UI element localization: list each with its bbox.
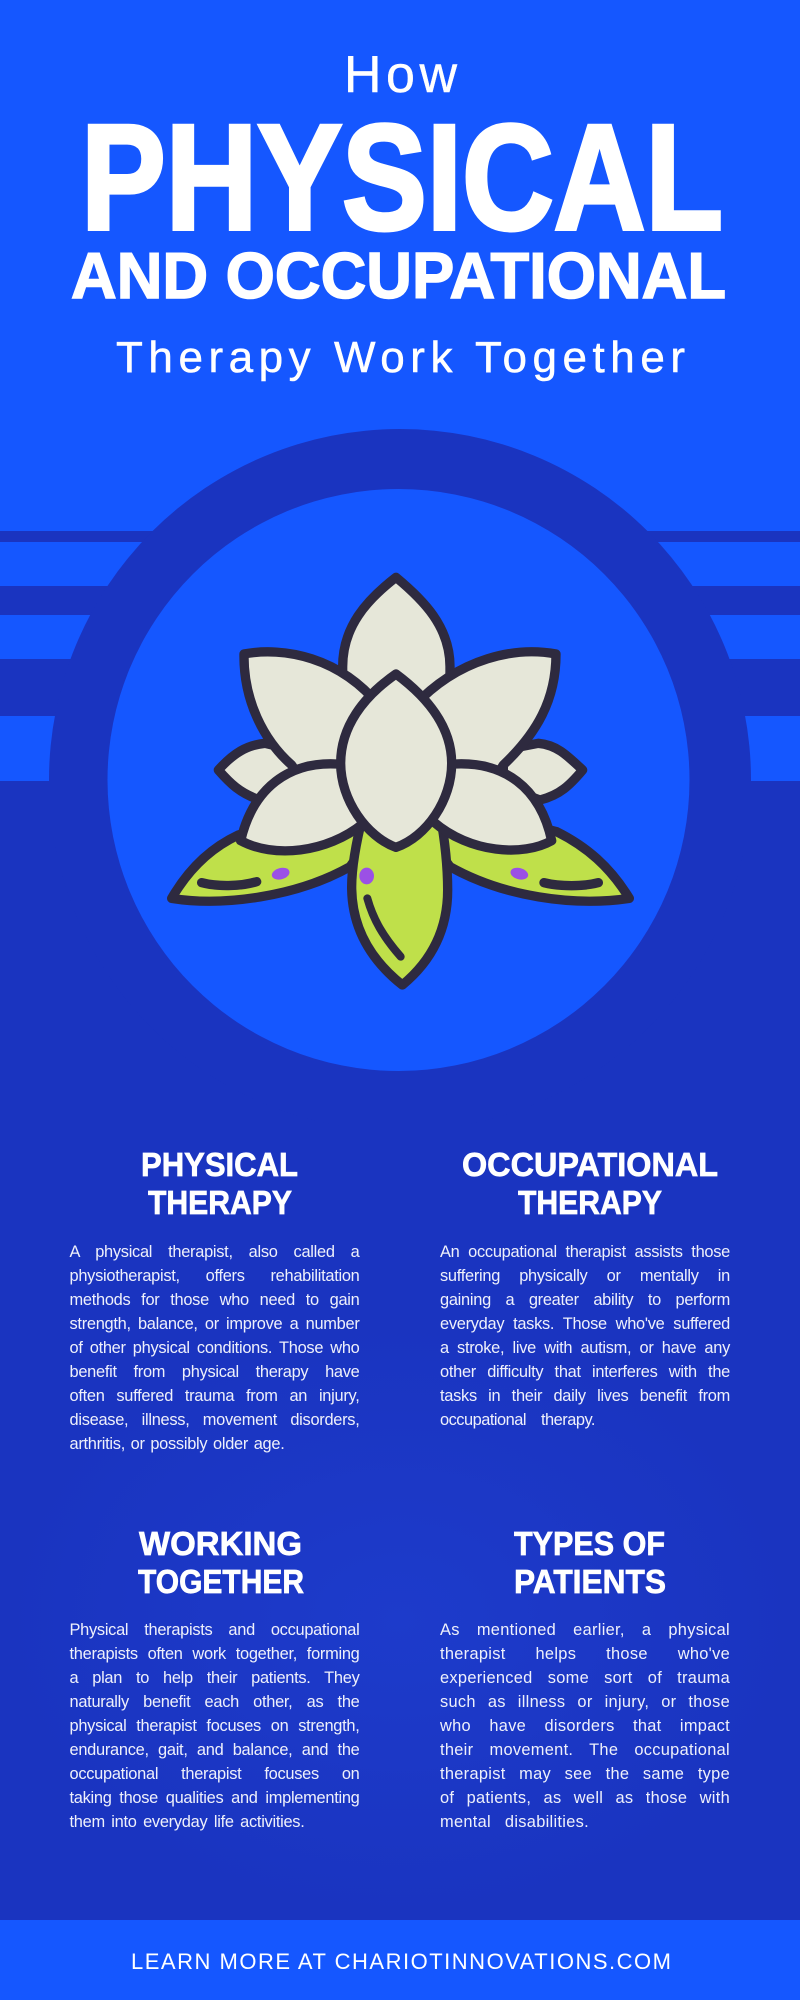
text: types of patients body: such as illness or injury, or those: [440, 1693, 730, 1711]
text: types of patients body: who have disorders that impact: [440, 1717, 730, 1735]
panel: working together: [70, 1528, 360, 1831]
text: physical therapy body: methods for those who need to gain: [70, 1291, 360, 1309]
text: physical therapy body: A physical therapist, also called a: [70, 1243, 360, 1261]
panel: types of patients: [440, 1528, 730, 1831]
text: occupational therapy body: a stroke, live with autism, or have any: [440, 1339, 730, 1357]
text: occupational therapy body: other difficulty that interferes with the: [440, 1363, 730, 1381]
text: types of patients body: experienced some sort of trauma: [440, 1669, 730, 1687]
heading: physical therapy: [141, 1150, 298, 1218]
text: occupational therapy body: gaining a greater ability to perform: [440, 1291, 730, 1309]
text: working together body: physical therapist focuses on strength,: [70, 1717, 360, 1735]
text: types of patients body: therapist may see the same type: [440, 1765, 730, 1783]
text: occupational therapy body: everyday tasks. Those who've suffered: [440, 1315, 730, 1333]
text: physical therapy body: strength, balance, or improve a number: [70, 1315, 360, 1333]
text: physical therapy body: often suffered trauma from an injury,: [70, 1387, 360, 1405]
icon: lotus flower: [167, 572, 634, 990]
text: working together body: Physical therapists and occupational: [70, 1621, 360, 1639]
text: types of patients body: therapist helps those who've: [440, 1645, 730, 1663]
text: working together body: occupational therapist focuses on: [70, 1765, 360, 1783]
text: types of patients body: of patients, as well as those with: [440, 1789, 730, 1807]
text: physical therapy body: of other physical conditions. Those who: [70, 1339, 360, 1357]
text: working together body: taking those qualities and implementing: [70, 1789, 360, 1807]
heading: working together: [138, 1528, 304, 1596]
title: AND OCCUPATIONAL: [71, 239, 726, 312]
text: occupational therapy body: occupational therapy.: [440, 1411, 595, 1429]
text: types of patients body: their movement. The occupational: [440, 1741, 730, 1759]
text: occupational therapy body: suffering physically or mentally in: [440, 1267, 730, 1285]
text: working together body: endurance, gait, and balance, and the: [70, 1741, 360, 1759]
heading: occupational therapy: [462, 1150, 718, 1218]
text: occupational therapy body: tasks in their daily lives benefit from: [440, 1387, 730, 1405]
title: How: [344, 46, 457, 104]
text: physical therapy body: benefit from physical therapy have: [70, 1363, 360, 1381]
heading: types of patients: [514, 1528, 666, 1596]
panel: occupational therapy: [440, 1150, 730, 1429]
title: [71, 46, 726, 382]
text: physical therapy body: physiotherapist, offers rehabilitation: [70, 1267, 360, 1285]
text: working together body: therapists often work together, forming: [70, 1645, 360, 1663]
text: types of patients body: As mentioned earlier, a physical: [440, 1621, 730, 1639]
text: physical therapy body: disease, illness, movement disorders,: [70, 1411, 360, 1429]
text: working together body: a plan to help their patients. They: [70, 1669, 360, 1687]
text: working together body: [70, 1621, 360, 1831]
footer band: [0, 1920, 800, 2000]
text: physical therapy body: arthritis, or possibly older age.: [70, 1435, 284, 1453]
text: types of patients body: [440, 1621, 730, 1831]
text: types of patients body: mental disabilities.: [440, 1813, 589, 1831]
text: working together body: them into everyday life activities.: [70, 1813, 304, 1831]
panel: physical therapy: [70, 1150, 360, 1453]
footer text: LEARN MORE AT CHARIOTINNOVATIONS.COM: [131, 1949, 671, 1974]
text: occupational therapy body: [440, 1243, 730, 1429]
text: physical therapy body: [70, 1243, 360, 1453]
text: occupational therapy body: An occupational therapist assists those: [440, 1243, 730, 1261]
title: Therapy Work Together: [116, 333, 685, 382]
text: working together body: naturally benefit each other, as the: [70, 1693, 360, 1711]
